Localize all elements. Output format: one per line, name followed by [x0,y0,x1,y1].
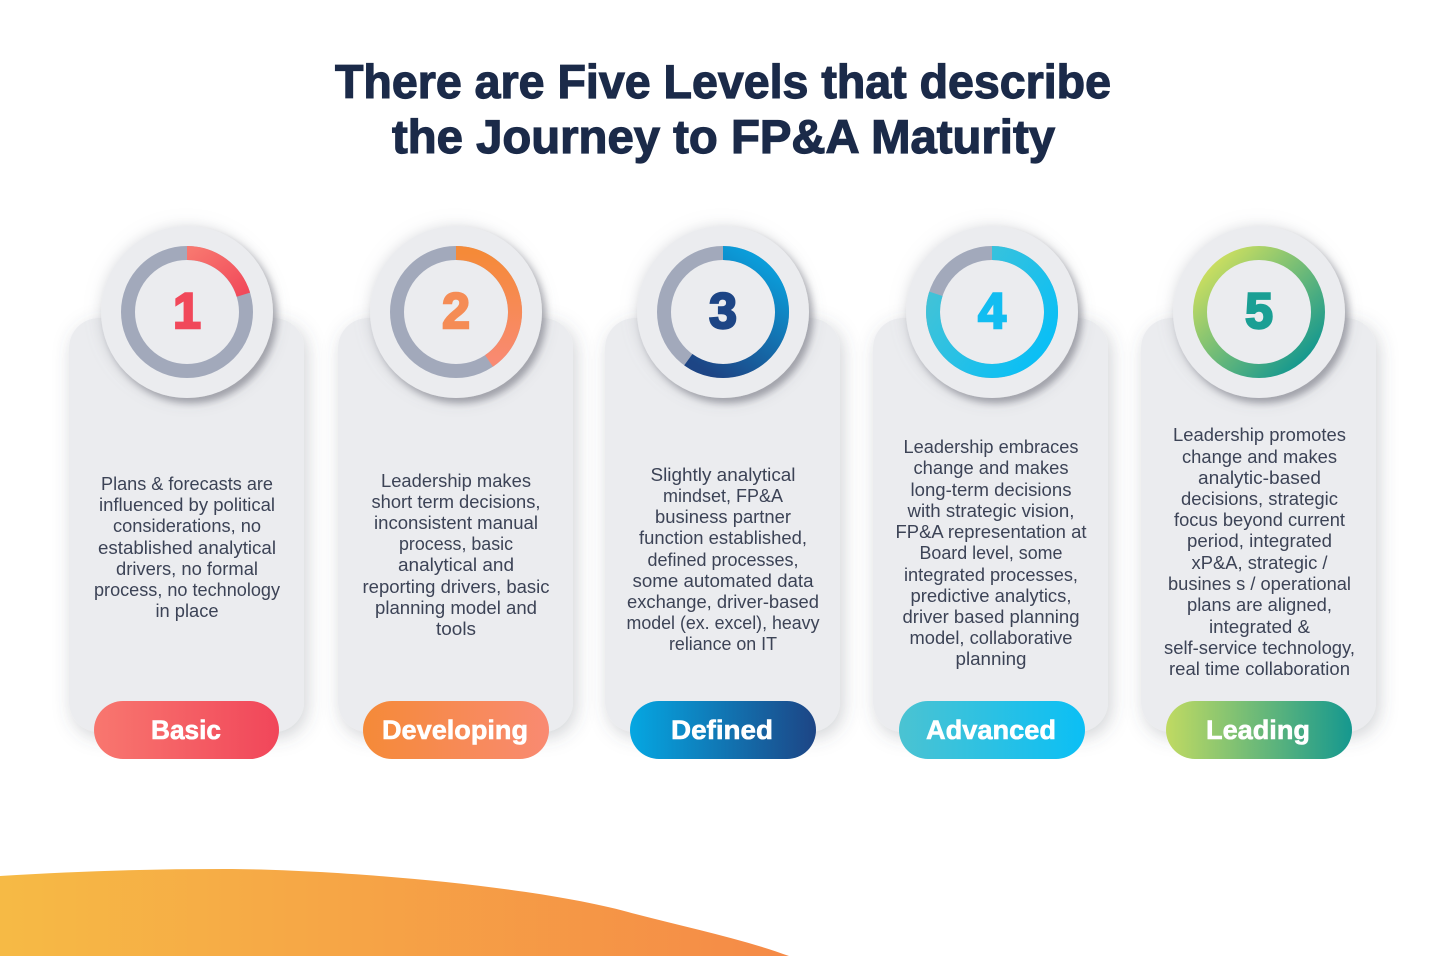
description text: change and makes [1182,447,1337,467]
description text: mindset, FP&A [663,486,783,506]
description text: defined processes, [648,550,798,570]
description text: considerations, no [113,516,261,536]
description text: focus beyond current [1174,510,1345,530]
description text: drivers, no formal [116,559,258,579]
description text: established analytical [98,538,276,558]
description text: Leadership embraces [904,437,1078,457]
card background [338,318,573,732]
progress ring 5 [1173,226,1345,398]
description text: integrated & [1209,617,1310,637]
label pill: Leading: Leading [1206,715,1310,745]
label pill: Developing: Developing [382,715,528,745]
label pill: Defined [630,701,816,759]
description text: FP&A representation at [896,522,1086,542]
description text [1164,425,1355,679]
progress ring 4: 4 [978,283,1006,339]
progress ring 1 [101,226,273,398]
description text: inconsistent manual [374,513,538,533]
label pill: Developing [363,701,549,759]
description text: Leadership makes [381,471,531,491]
description text [94,474,280,621]
description text: analytic-based [1198,468,1321,488]
title: the Journey to FP&A Maturity [392,110,1055,163]
progress ring 5: 5 [1245,283,1273,339]
description text: process, no technology [94,580,280,600]
title [335,55,1111,163]
description text: predictive analytics, [910,586,1072,606]
description text: reliance on IT [669,634,777,654]
progress ring 2 [370,226,542,398]
panel: level 2 Developing [338,226,573,759]
description text: in place [156,601,218,621]
panel: level 5 Leading [1141,226,1376,759]
description text: business partner [655,507,791,527]
description text: xP&A, strategic / [1192,553,1328,573]
description text: function established, [639,528,807,548]
panel: level 3 Defined [605,226,840,759]
description text: self-service technology, [1164,638,1355,658]
description text [362,471,550,639]
panel: level 1 Basic [69,226,304,759]
title: There are Five Levels that describe [335,55,1111,108]
description text: real time collaboration [1169,659,1350,679]
description text: short term decisions, [372,492,540,512]
label pill: Basic: Basic [151,715,221,745]
panel: level 4 Advanced [873,226,1108,759]
progress ring 3 [637,226,809,398]
description text [896,437,1086,669]
card background [873,318,1108,732]
description text: planning [956,649,1026,669]
description text: Leadership promotes [1173,425,1346,445]
card background [605,318,840,732]
label pill: Defined: Defined [671,715,773,745]
progress ring 1: 1 [173,283,201,339]
description text: with strategic vision, [906,501,1074,521]
description text: plans are aligned, [1187,595,1332,615]
bottom orange wave [0,869,789,956]
description text: some automated data [632,571,815,591]
description text: tools [436,619,476,639]
progress ring 2: 2 [442,283,470,339]
description text: analytical and [398,555,514,575]
progress ring 3: 3 [709,283,737,339]
description text: model, collaborative [910,628,1072,648]
label pill: Advanced [899,701,1085,759]
description text: period, integrated [1187,531,1332,551]
card background [69,318,304,732]
description text: long-term decisions [910,480,1072,500]
description text: change and makes [914,458,1068,478]
description text: reporting drivers, basic [362,577,550,597]
description text [626,465,820,654]
description text: Plans & forecasts are [101,474,273,494]
progress ring 4 [906,226,1078,398]
description text: planning model and [375,598,537,618]
label pill: Advanced: Advanced [926,715,1056,745]
description text: exchange, driver-based [627,592,819,612]
description text: influenced by political [99,495,275,515]
description text: Board level, some [920,543,1062,563]
description text: integrated processes, [904,565,1078,585]
description text: driver based planning [902,607,1080,627]
description text: model (ex. excel), heavy [626,613,820,633]
description text: decisions, strategic [1181,489,1338,509]
label pill: Basic [94,701,279,759]
description text: Slightly analytical [650,465,796,485]
label pill: Leading [1166,701,1352,759]
description text: busines s / operational [1168,574,1351,594]
description text: process, basic [399,534,513,554]
card background [1141,318,1376,732]
